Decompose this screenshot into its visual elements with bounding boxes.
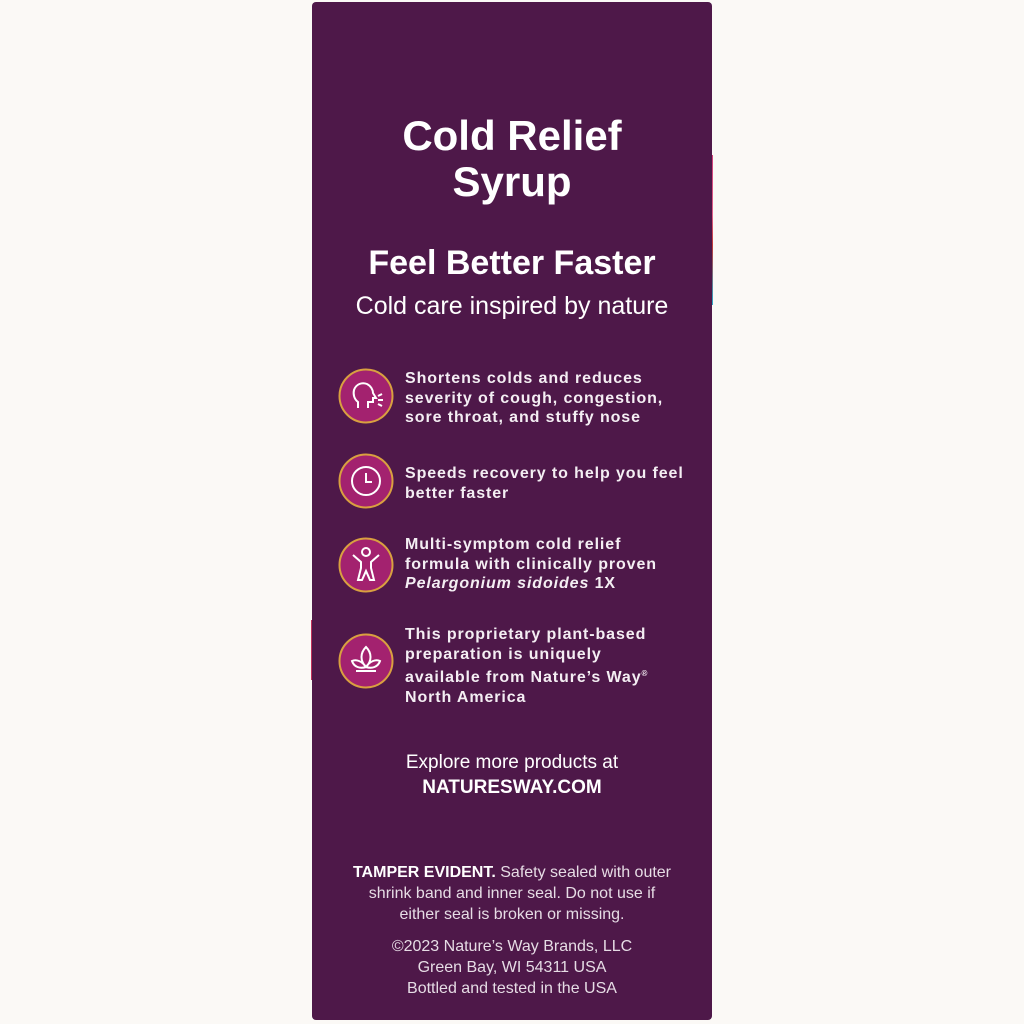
feature text 4 [405,626,648,706]
text: copyright: Green Bay, WI 54311 USA [418,959,606,976]
text: copyright: Bottled and tested in the USA [407,980,617,997]
heading: tagline: Feel Better Faster [368,244,656,282]
text: website [406,752,618,798]
text: website: Explore more products at [406,752,618,773]
text: tamper evident: shrink band and inner seal. Do not use if [369,885,655,902]
feature text 1: Shortens colds and reduces [405,370,643,387]
feature text 2: Speeds recovery to help you feel [405,465,684,482]
edge: left side decoration [311,620,315,680]
feature text 4: North America [405,688,526,706]
feature text 3: formula with clinically proven [405,556,657,572]
title: Cold Relief [402,112,622,159]
feature text 4: This proprietary plant-based [405,626,646,643]
text: tamper evident [353,864,671,923]
icon: clock [338,454,394,508]
text: tamper evident: TAMPER EVIDENT. Safety sealed with outer [353,864,671,881]
text: tamper evident: either seal is broken or missing. [400,906,624,923]
feature text 4: preparation is uniquely [405,646,602,662]
edge: right side decoration [705,155,713,305]
icon: person [338,538,394,592]
subheading: Cold care inspired by nature [356,292,668,320]
text: copyright: ©2023 Nature’s Way Brands, LLC [392,938,632,955]
panel: product box side [312,2,712,1020]
feature text 2 [405,465,684,502]
title: Syrup [452,158,572,205]
feature text 1: sore throat, and stuffy nose [405,409,641,426]
icon: head breathing [338,368,394,424]
feature text 4: available from Nature’s Way® [405,669,648,686]
feature text 2: better faster [405,484,509,502]
feature text 1: severity of cough, congestion, [405,390,663,406]
feature text 1 [405,370,663,426]
feature text 3 [405,536,657,592]
feature text 3: Pelargonium sidoides 1X [405,575,616,592]
title [402,112,622,205]
icon: leaves [338,634,394,688]
text: website: NATURESWAY.COM [422,777,602,798]
feature text 3: Multi-symptom cold relief [405,536,621,553]
text: copyright [392,938,632,997]
